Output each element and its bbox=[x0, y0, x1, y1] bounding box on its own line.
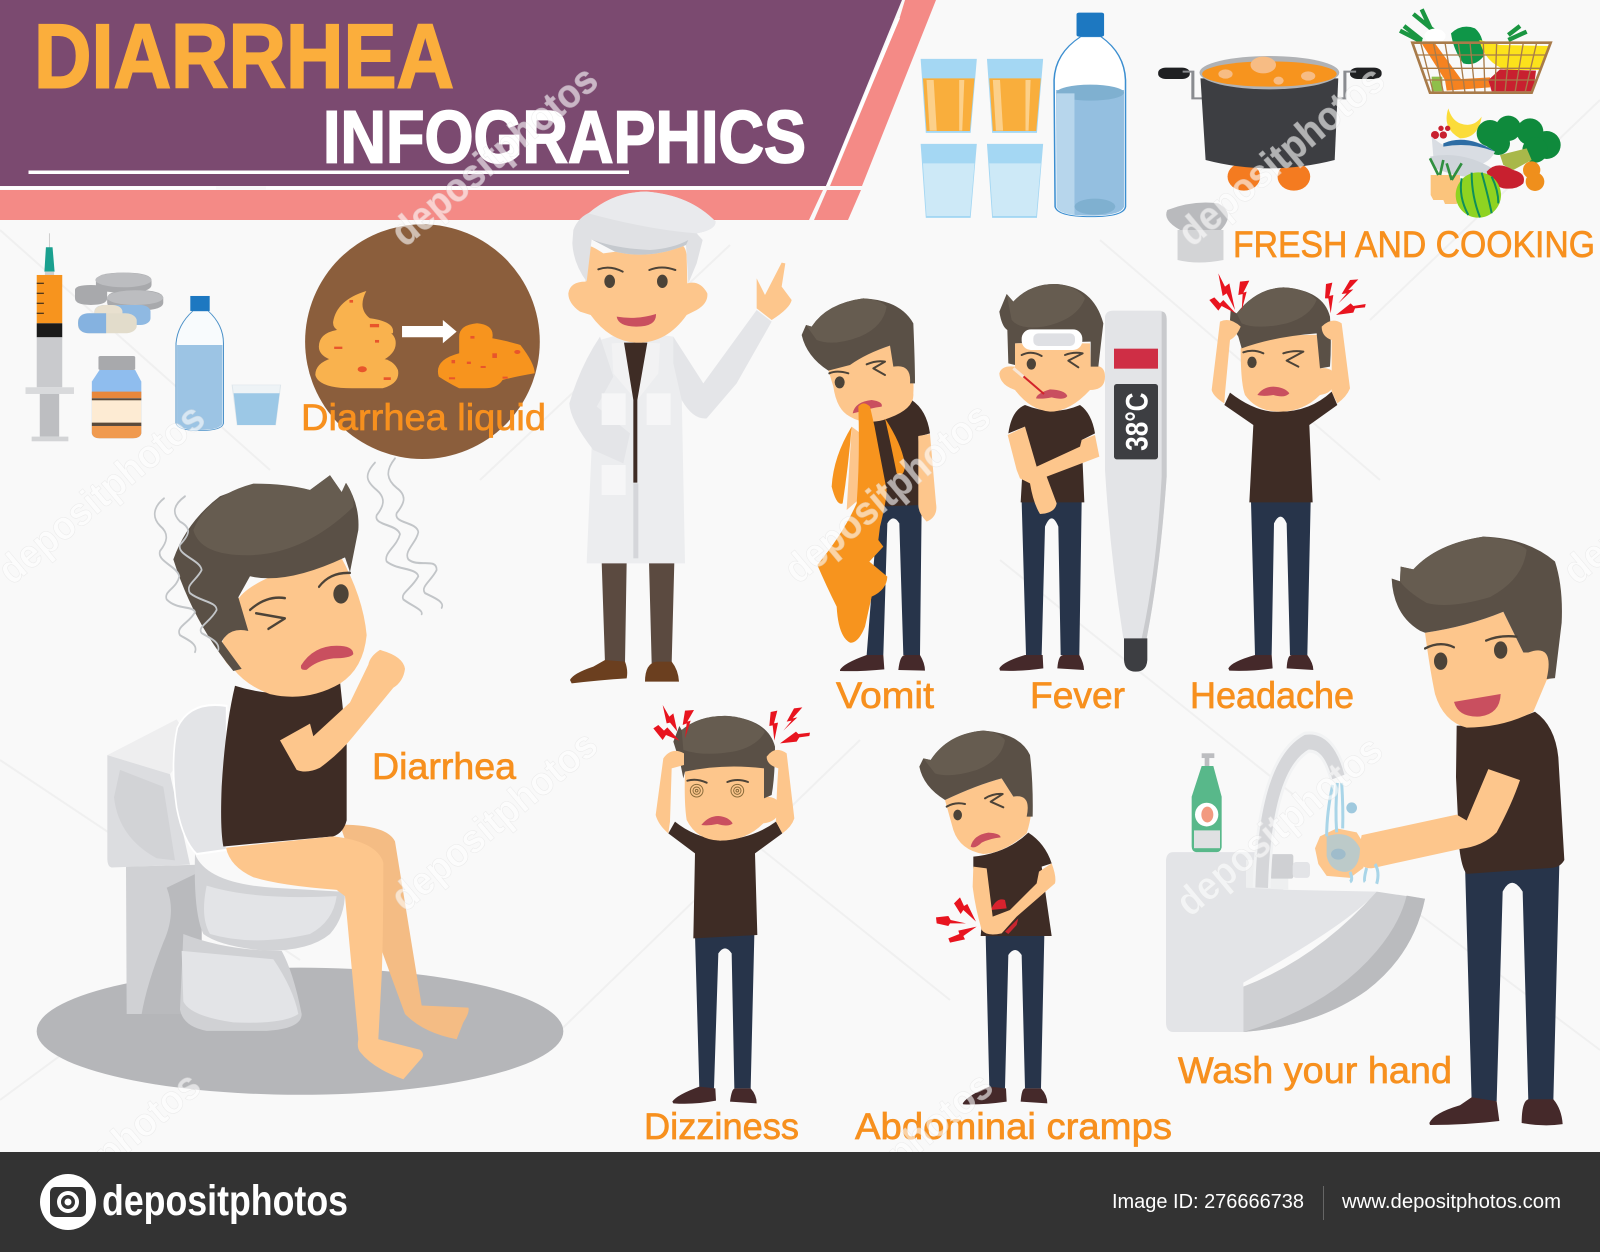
icon: juice glass 1 bbox=[921, 59, 976, 132]
pineapple bbox=[1500, 148, 1532, 170]
arms bbox=[656, 750, 794, 833]
head bbox=[919, 731, 1033, 854]
soup bbox=[1199, 56, 1339, 89]
arrow bbox=[402, 320, 457, 343]
icon: water bottle bbox=[176, 296, 223, 431]
brown circle bbox=[305, 224, 540, 459]
icon: vial bbox=[92, 356, 141, 438]
smell lines bbox=[155, 458, 442, 652]
lab coat bbox=[569, 310, 772, 563]
banner: purple panel bbox=[0, 0, 902, 186]
basket wire bbox=[1412, 43, 1551, 93]
icon: water glass 1 bbox=[921, 144, 976, 217]
shoes bbox=[672, 1087, 757, 1104]
icon: vegetable basket bbox=[1400, 9, 1551, 93]
shirt bbox=[668, 822, 782, 938]
head bbox=[568, 192, 716, 343]
radish pots bbox=[1430, 158, 1462, 204]
label: Diarrhea liquid: Diarrhea liquid bbox=[301, 397, 546, 438]
trousers bbox=[695, 935, 754, 1088]
panel: diarrhea liquid circle bbox=[305, 224, 540, 459]
head bbox=[1230, 287, 1336, 412]
trousers bbox=[867, 505, 922, 655]
head bbox=[673, 716, 780, 841]
head bbox=[802, 298, 915, 422]
flames bbox=[1228, 163, 1310, 191]
icon: chef hat bbox=[1166, 202, 1228, 262]
icon: syringe bbox=[26, 233, 74, 441]
footer logo icon bbox=[40, 1174, 96, 1230]
shoes bbox=[963, 1087, 1047, 1104]
shoes bbox=[1228, 655, 1313, 671]
head bbox=[173, 475, 367, 697]
icon: fresh food pile bbox=[1430, 108, 1561, 218]
title: DIARRHEA: DIARRHEA bbox=[34, 6, 454, 107]
watermark text: depositphotos bbox=[1168, 727, 1391, 925]
label: Abdominal cramps: Abdominai cramps bbox=[855, 1106, 1172, 1147]
icon: cooking pot on flames bbox=[1158, 56, 1382, 191]
illustration: doctor bbox=[568, 192, 792, 683]
header banner bbox=[0, 0, 936, 220]
pain bolts bbox=[653, 705, 810, 743]
arms bbox=[1008, 427, 1099, 514]
shoes bbox=[840, 655, 925, 671]
trousers bbox=[1251, 502, 1311, 655]
apple bbox=[1487, 165, 1524, 189]
shoes bbox=[1429, 1097, 1563, 1125]
orange bbox=[1523, 161, 1544, 191]
red glow on stomach bbox=[991, 899, 1007, 910]
shirt bbox=[1456, 712, 1564, 874]
icon: glass of water bbox=[232, 385, 281, 425]
back leg bbox=[340, 825, 469, 1039]
icon: faucet bbox=[1262, 742, 1338, 888]
label: Diarrhea: Diarrhea bbox=[372, 746, 516, 787]
drinks: juice and water glasses bbox=[921, 13, 1126, 217]
pain bolts bbox=[936, 897, 977, 943]
footer image id: Image ID: 276666738 bbox=[1112, 1191, 1304, 1213]
watermark text: depositphotos bbox=[1170, 57, 1393, 255]
icon: water glass 2 bbox=[988, 144, 1042, 217]
illustration: headache man bbox=[1209, 273, 1366, 671]
watermark text: depositphotos bbox=[383, 722, 606, 920]
hand pointing bbox=[757, 263, 792, 320]
vegetables bbox=[1400, 9, 1548, 91]
icon: soap bottle bbox=[1192, 753, 1222, 852]
label: Wash your hand: Wash your hand bbox=[1178, 1050, 1452, 1091]
watermark text: depositphotos bbox=[776, 394, 999, 592]
arm bbox=[280, 650, 405, 772]
medicine items bbox=[26, 233, 281, 441]
temperature reading: 38°C bbox=[1119, 392, 1155, 451]
footer brand name: depositphotos bbox=[102, 1177, 348, 1225]
arms bbox=[973, 863, 1055, 934]
shoes bbox=[999, 655, 1084, 671]
label: Fever: Fever bbox=[1030, 675, 1125, 716]
shirt bbox=[973, 833, 1052, 936]
pain bolts bbox=[1209, 273, 1366, 315]
illustration: hand washing bbox=[1166, 537, 1564, 1125]
footer website: www.depositphotos.com bbox=[1341, 1191, 1561, 1213]
broccoli bbox=[1477, 116, 1561, 163]
illustration: man on toilet bbox=[37, 458, 563, 1095]
footer bar bbox=[0, 1152, 1600, 1252]
handles bbox=[1158, 68, 1382, 98]
cherries bbox=[1431, 126, 1450, 139]
shirt bbox=[1008, 405, 1095, 502]
illustration: abdominal cramps man bbox=[919, 731, 1055, 1104]
shirt bbox=[860, 400, 930, 507]
icon: juice glass 2 bbox=[988, 59, 1042, 132]
trousers bbox=[602, 562, 674, 663]
arms bbox=[847, 427, 936, 522]
arm bbox=[1357, 769, 1520, 868]
icon: liquid stool bbox=[438, 323, 535, 388]
icon: toilet bbox=[107, 705, 345, 1031]
floor shadow bbox=[37, 968, 563, 1095]
illustration: vomiting man bbox=[802, 298, 936, 671]
vomit bbox=[817, 403, 905, 643]
illustration: fever man with thermometer bbox=[999, 284, 1167, 672]
watermark text: depositphotos bbox=[383, 57, 606, 255]
shirt bbox=[221, 681, 347, 846]
banana bbox=[1447, 108, 1482, 138]
fish bbox=[1430, 137, 1495, 178]
illustration: dizzy man bbox=[653, 705, 810, 1104]
shoes bbox=[570, 660, 679, 683]
title: INFOGRAPHICS: INFOGRAPHICS bbox=[323, 96, 806, 178]
arms bbox=[1212, 320, 1350, 403]
pot body bbox=[1201, 78, 1338, 168]
labels: symptom captions bbox=[644, 224, 1595, 1147]
label: Dizziness: Dizziness bbox=[644, 1106, 799, 1147]
trousers bbox=[986, 935, 1044, 1088]
label: Headache: Headache bbox=[1190, 675, 1354, 716]
icon: stool bbox=[315, 291, 398, 388]
label: Vomit: Vomit bbox=[836, 675, 935, 716]
hands with soap and water bbox=[1315, 783, 1378, 884]
trousers bbox=[1022, 502, 1082, 655]
shirt bbox=[1224, 392, 1337, 502]
watermelon bbox=[1456, 172, 1501, 218]
icon: pills and capsules bbox=[75, 273, 163, 333]
trousers bbox=[1465, 864, 1559, 1101]
front leg bbox=[226, 836, 423, 1079]
head bbox=[1392, 537, 1562, 728]
icon: large water bottle bbox=[1054, 13, 1126, 217]
icon: sink bbox=[1166, 852, 1425, 1032]
thermometer bbox=[1105, 311, 1167, 672]
head bbox=[999, 284, 1105, 412]
